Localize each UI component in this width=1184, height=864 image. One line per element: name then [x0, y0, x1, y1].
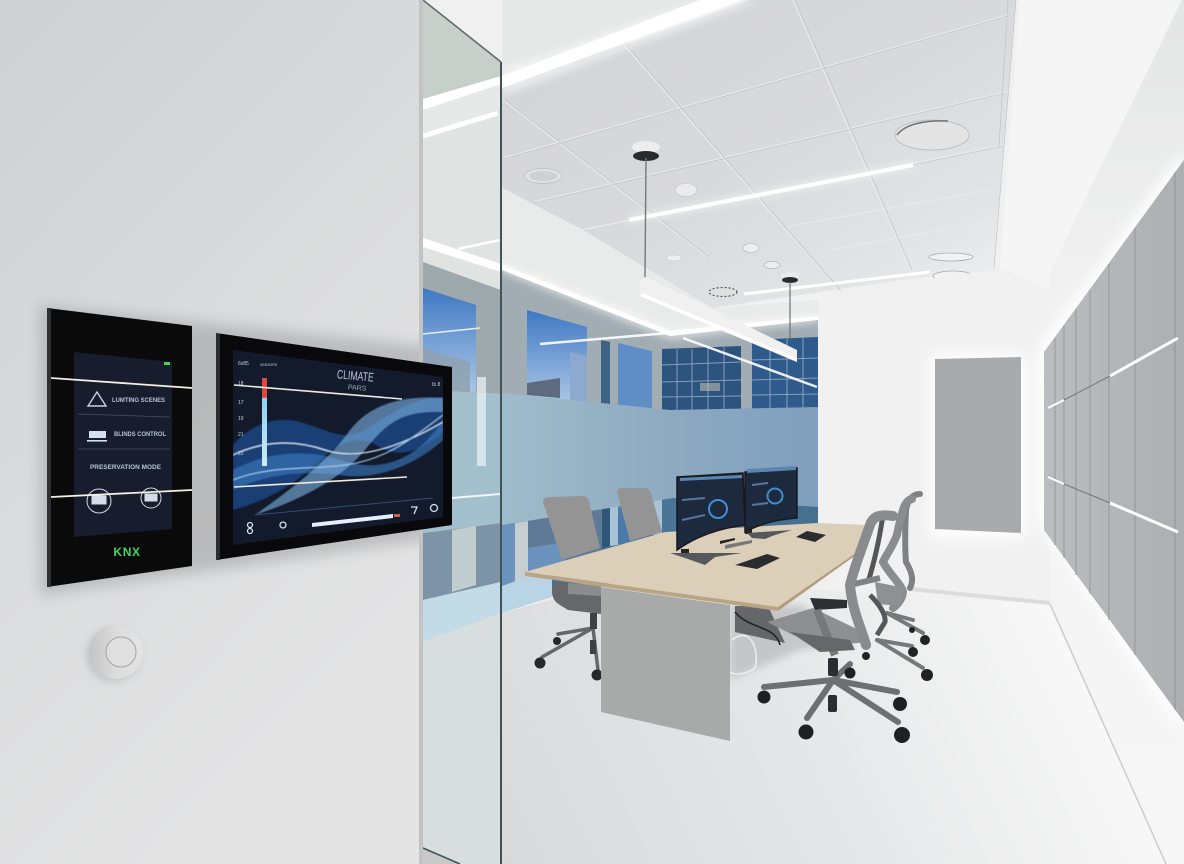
left readouts: 18 — [238, 381, 244, 387]
left readouts: 19 — [238, 416, 244, 422]
window reflection in glass — [423, 262, 501, 394]
screen label: lighting: LUMTING SCENES — [112, 397, 166, 404]
glass edges — [500, 62, 502, 864]
climate monitor — [216, 333, 452, 560]
back right chairs — [862, 494, 933, 681]
front chair — [758, 515, 910, 743]
left readouts: 17 — [238, 400, 244, 406]
bottom slider — [312, 514, 393, 527]
table leg — [601, 587, 730, 741]
left readouts: 21 — [238, 432, 244, 438]
baseboard — [910, 587, 1050, 605]
pendant light — [632, 141, 799, 362]
monitors on table — [670, 466, 797, 565]
left wall — [0, 0, 420, 864]
ceiling light strips — [502, 0, 930, 294]
acoustic panel with backlight — [930, 354, 1026, 538]
acoustic wall panels — [1044, 160, 1184, 722]
frosted band in glass — [423, 390, 501, 533]
gauge bar — [262, 378, 267, 466]
climate heading: CLIMATE — [336, 367, 374, 385]
floor — [502, 575, 1166, 864]
right wall — [1000, 0, 1184, 864]
left readouts: SENSORS — [260, 363, 278, 367]
keyboards — [735, 531, 826, 569]
wall washer light strip — [502, 262, 818, 387]
glass partition — [423, 0, 501, 864]
top right status: Ib 8 — [432, 382, 441, 388]
soffit above ceiling — [502, 0, 760, 80]
left readouts: 22 — [238, 451, 244, 457]
screen — [233, 350, 443, 545]
window sill glow — [502, 568, 552, 613]
ceiling — [502, 0, 1016, 308]
location label: PARS — [348, 384, 367, 393]
shadow behind wall panels — [40, 305, 460, 595]
screen label: blinds: BLINDS CONTROL — [114, 431, 166, 438]
table top — [525, 523, 867, 611]
left readouts: 6x85 — [238, 361, 249, 367]
wall thermostat button — [86, 625, 143, 682]
wall light slots — [1048, 338, 1178, 532]
glass light reflections — [423, 76, 501, 110]
back wall — [818, 290, 1050, 602]
screen icons: round buttons — [87, 488, 161, 513]
window wall with city view — [502, 268, 818, 420]
soffit wall band above the windows — [502, 188, 818, 335]
frosted glass band — [502, 393, 818, 525]
screen label: mode: PRESERVATION MODE — [90, 464, 161, 471]
bottom icons — [248, 504, 438, 534]
view below frosted band — [502, 490, 818, 600]
KNX control panel — [47, 308, 192, 587]
left readouts — [238, 361, 278, 457]
screen icon: blinds — [87, 431, 107, 442]
reflections — [234, 385, 407, 487]
rear chairs — [534, 488, 662, 680]
KNX logo: KNX — [113, 545, 141, 559]
under table cables and shadow — [730, 605, 860, 680]
status icon — [164, 362, 170, 365]
panel screen — [74, 352, 172, 537]
light reflections — [51, 378, 192, 497]
climate wave chart — [233, 397, 443, 515]
ceiling speakers and sensors — [524, 120, 973, 296]
screen icon: triangle — [88, 392, 106, 406]
